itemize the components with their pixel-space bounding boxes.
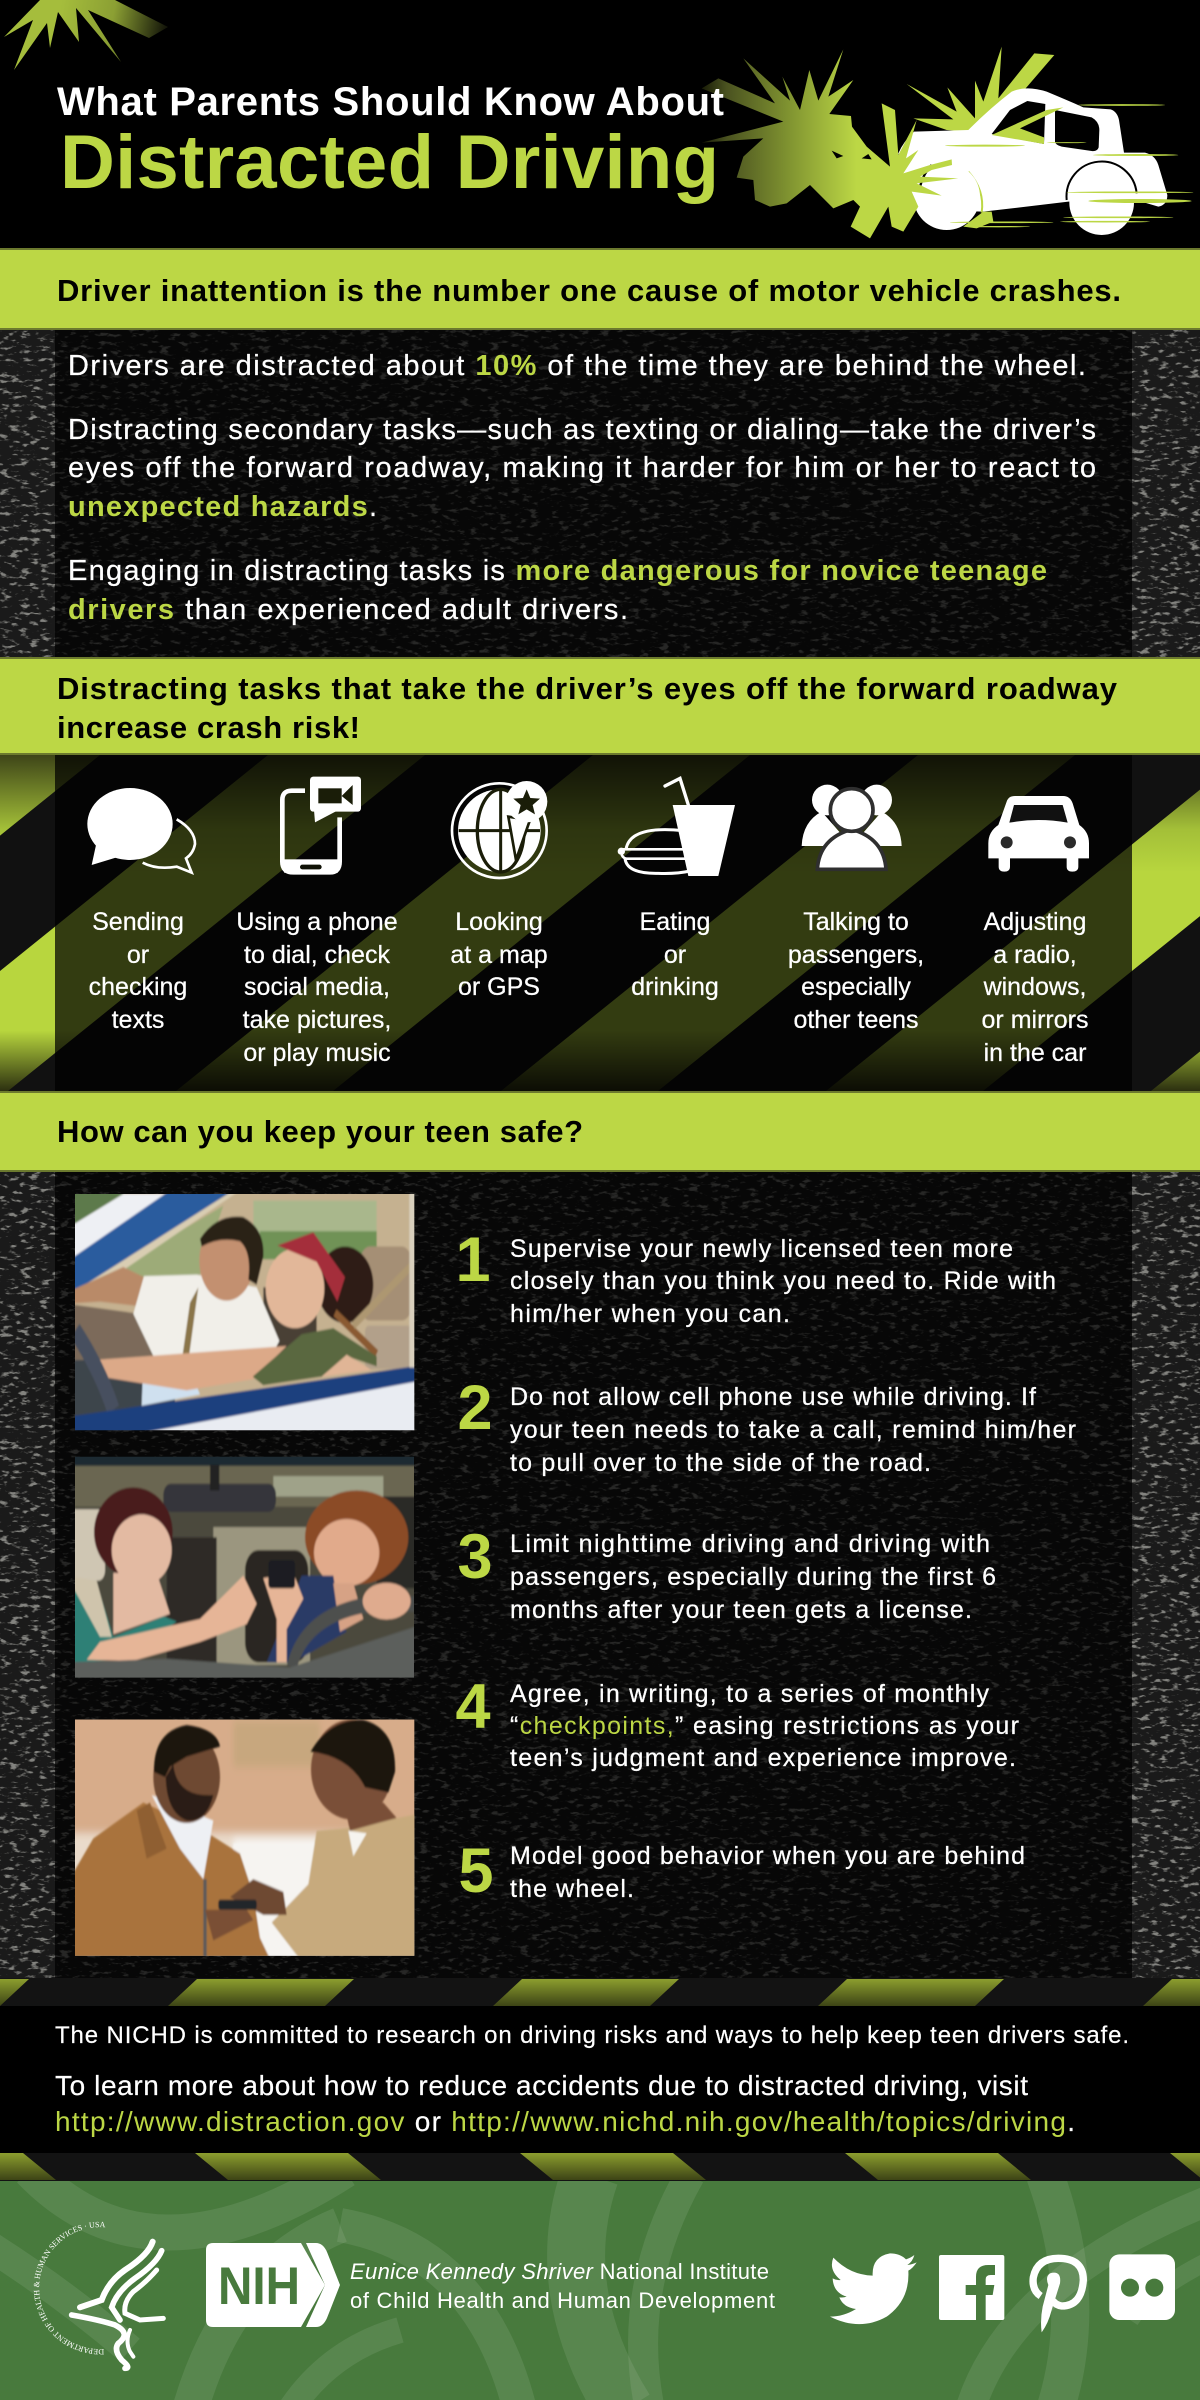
- icon: twitter: [830, 2253, 917, 2324]
- icon: group of passengers: [802, 785, 902, 869]
- photo: distracted driver with passenger: [75, 1456, 414, 1678]
- label: looking at a map: at a map: [450, 941, 548, 969]
- label: looking at a map: Looking: [455, 908, 543, 936]
- panel: safety tips: [0, 1172, 1200, 1978]
- hazard stripe bottom: [0, 2153, 1200, 2181]
- banner: keep your teen safe: [0, 1091, 1200, 1172]
- panel: distracting tasks: [0, 755, 1200, 1091]
- learn more text: [55, 2070, 1075, 2137]
- tip 2: [457, 1373, 1076, 1477]
- icon: globe with map pin: [452, 781, 547, 878]
- tip 3: Limit nighttime driving and driving with: [510, 1530, 990, 1558]
- tip 5: 5: [458, 1836, 494, 1906]
- label: talking to passengers: passengers,: [788, 941, 924, 969]
- institute name: of Child Health and Human Development: [350, 2288, 775, 2313]
- label: adjusting controls: windows,: [983, 973, 1086, 1001]
- panel: NICHD commitment and links: [0, 1978, 1200, 2181]
- tip 5: [458, 1836, 1025, 1906]
- tip 3: 3: [457, 1522, 493, 1592]
- label: adjusting controls: in the car: [984, 1039, 1086, 1067]
- fact two: Distracting secondary tasks—such as texting or dialing—take the driver’s: [68, 414, 1096, 446]
- fact three: Engaging in distracting tasks is more dangerous for novice teenage: [68, 555, 1047, 587]
- crash illustration: [702, 47, 1193, 238]
- label: eating or drinking: or: [664, 941, 686, 969]
- banner: driver inattention: Driver inattention is the number one cause of motor vehicle crashes.: [57, 273, 1121, 308]
- hazard stripe top: [0, 1978, 1200, 2006]
- tip 2: to pull over to the side of the road.: [510, 1449, 931, 1477]
- banner: distracting tasks: increase crash risk!: [57, 710, 360, 745]
- logo: NIH: NIH: [218, 2257, 300, 2316]
- logo: NIH: [206, 2243, 340, 2327]
- tip 4: teen’s judgment and experience improve.: [510, 1744, 1016, 1772]
- label: adjusting controls: a radio,: [993, 941, 1077, 969]
- tip 3: passengers, especially during the first 6: [510, 1563, 996, 1591]
- icon: pinterest: [1033, 2258, 1083, 2332]
- banner: keep your teen safe: How can you keep your teen safe?: [57, 1114, 583, 1149]
- label: adjusting controls: Adjusting: [984, 908, 1086, 936]
- label: looking at a map: or GPS: [458, 973, 540, 1001]
- label: talking to passengers: Talking to: [803, 908, 909, 936]
- label: talking to passengers: other teens: [793, 1006, 919, 1034]
- photo: father handing keys to son: [75, 1720, 414, 1956]
- fact three: drivers than experienced adult drivers.: [68, 594, 628, 626]
- tip 2: Do not allow cell phone use while driving. If: [510, 1383, 1036, 1411]
- tip 4: 4: [455, 1672, 491, 1742]
- icon: smartphone with video bubble: [282, 777, 361, 873]
- tip 3: [457, 1522, 996, 1624]
- tip 2: your teen needs to take a call, remind him/her: [510, 1416, 1076, 1444]
- icon: facebook: [939, 2255, 1004, 2320]
- fact two: [68, 414, 1096, 523]
- tip 5: Model good behavior when you are behind: [510, 1842, 1025, 1870]
- tip 4: “checkpoints,” easing restrictions as your: [510, 1712, 1019, 1740]
- panel: distraction facts: [0, 330, 1200, 657]
- tip 3: months after your teen gets a license.: [510, 1596, 972, 1624]
- banner: driver inattention: [0, 248, 1200, 330]
- label: using a phone: take pictures,: [243, 1006, 391, 1034]
- title line two: Distracted Driving: [60, 120, 719, 205]
- banner: distracting tasks: [0, 657, 1200, 755]
- label: sending texts: checking: [89, 973, 187, 1001]
- tip 1: Supervise your newly licensed teen more: [510, 1235, 1013, 1263]
- label: talking to passengers: [788, 908, 924, 1034]
- tip 1: 1: [455, 1225, 491, 1295]
- label: using a phone: [236, 908, 398, 1067]
- tip 2: 2: [457, 1373, 493, 1443]
- label: using a phone: social media,: [244, 973, 390, 1001]
- label: using a phone: to dial, check: [244, 941, 390, 969]
- tip 1: him/her when you can.: [510, 1300, 790, 1328]
- label: eating or drinking: Eating: [640, 908, 710, 936]
- label: sending texts: texts: [112, 1006, 164, 1034]
- fact three: [68, 555, 1047, 626]
- icon: car front: [988, 796, 1089, 872]
- title line one: What Parents Should Know About: [57, 80, 724, 124]
- label: looking at a map: [450, 908, 548, 1001]
- icon: burger and drink: [618, 778, 735, 876]
- label: eating or drinking: [631, 908, 719, 1001]
- header: [4, 0, 1193, 238]
- label: using a phone: Using a phone: [236, 908, 398, 936]
- footer: [0, 2181, 1200, 2400]
- corner burst graphic: [4, 0, 168, 70]
- label: adjusting controls: [982, 908, 1088, 1067]
- photo: father riding with teen driver: [75, 1194, 414, 1430]
- tip 4: [455, 1672, 1019, 1772]
- icon: chat bubbles: [87, 788, 195, 873]
- label: eating or drinking: drinking: [631, 973, 719, 1001]
- fact one: Drivers are distracted about 10% of the time they are behind the wheel.: [68, 350, 1086, 382]
- label: talking to passengers: especially: [801, 973, 911, 1001]
- label: using a phone: or play music: [243, 1039, 391, 1067]
- label: sending texts: or: [127, 941, 149, 969]
- institute name: [350, 2259, 775, 2313]
- institute name: Eunice Kennedy Shriver National Institute: [350, 2259, 769, 2284]
- tip 4: Agree, in writing, to a series of monthly: [510, 1680, 990, 1708]
- tip 1: closely than you think you need to. Ride with: [510, 1267, 1056, 1295]
- icon: flickr: [1109, 2254, 1175, 2320]
- label: adjusting controls: or mirrors: [982, 1006, 1088, 1034]
- banner: distracting tasks: Distracting tasks that take the driver’s eyes off the forward roadway: [57, 671, 1118, 706]
- logo: HHS seal: [34, 2222, 166, 2372]
- tip 5: the wheel.: [510, 1875, 634, 1903]
- label: sending texts: [89, 908, 187, 1034]
- learn more text: http://www.distraction.gov or http://www.nichd.nih.gov/health/topics/driving.: [55, 2106, 1075, 2137]
- logo: HHS seal: DEPARTMENT OF HEALTH & HUMAN SERVICES · USA: [34, 2222, 106, 2354]
- commitment text: The NICHD is committed to research on driving risks and ways to help keep teen drivers safe.: [55, 2022, 1129, 2049]
- tip 1: [455, 1225, 1056, 1328]
- label: sending texts: Sending: [92, 908, 184, 936]
- fact two: unexpected hazards.: [68, 491, 377, 523]
- fact two: eyes off the forward roadway, making it harder for him or her to react to: [68, 452, 1096, 484]
- learn more text: To learn more about how to reduce accidents due to distracted driving, visit: [55, 2070, 1028, 2101]
